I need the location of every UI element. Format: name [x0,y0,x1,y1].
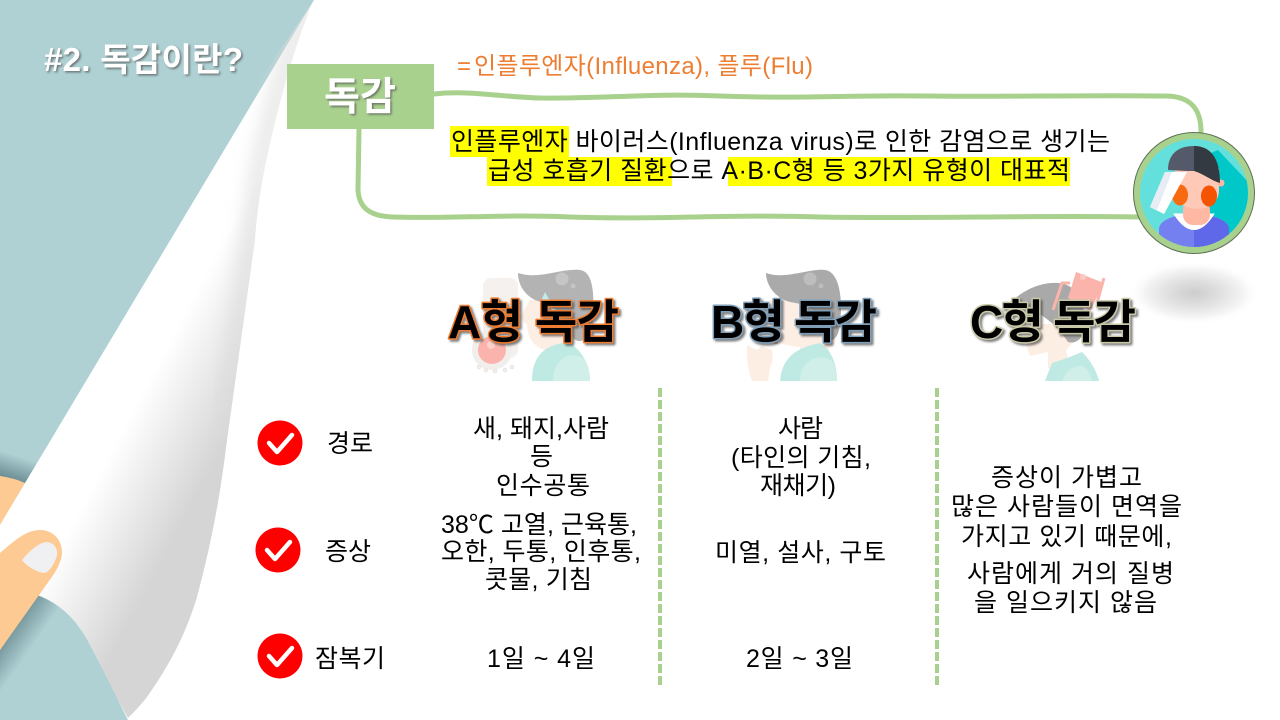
column B: route: 사람 [778,415,823,443]
definition text: 급성 호흡기 질환으로 A·B·C형 등 3가지 유형이 대표적 [488,157,1070,185]
column A: fever illustration [472,270,594,381]
column B: route: 재채기) [760,472,836,500]
green label box [287,64,434,129]
column A: route: 새, 돼지,사람 [473,415,609,443]
column B: route: (타인의 기침, [731,444,871,472]
column B: coughing illustration [747,270,841,381]
check icon: symptoms [256,528,300,572]
column A: route: 인수공통 [496,472,590,500]
column C: description: 사람에게 거의 질병 [967,560,1174,588]
fingernail [22,542,57,573]
column C: description: 가지고 있기 때문에, [961,523,1172,551]
alias line: = [457,53,471,80]
green label box: 독감 [324,76,396,119]
title: #2. 독감이란? [44,41,243,78]
column B: route [731,415,871,500]
column C: description: 을 일으키지 않음 [974,589,1157,617]
definition text: 인플루엔자 바이러스(Influenza virus)로 인한 감염으로 생기는 [451,128,1110,156]
heading: B형 독감: B형 독감 [711,296,877,348]
column A: route [473,415,609,500]
column B: symptoms: 미열, 설사, 구토 [715,539,886,567]
check icon: route [258,420,302,466]
icon: avatar with fever [1134,132,1254,254]
heading: C형 독감: C형 독감 [970,296,1136,348]
definition text [450,126,1110,186]
column B: incubation: 2일 ~ 3일 [746,645,853,673]
column A: route: 등 [530,443,553,471]
page curl background [0,0,314,720]
heading: A형 독감: A형 독감 [448,296,619,348]
column C: description: 증상이 가볍고 [991,464,1142,492]
column A: symptoms: 오한, 두통, 인후통, [441,538,641,566]
connector frame lines [358,93,1201,218]
column C: description [951,464,1182,617]
row label: symptoms: 증상 [325,538,371,566]
row label: incubation: 잠복기 [315,645,385,673]
curled page flap [0,0,314,718]
column C: description: 많은 사람들이 면역을 [951,493,1182,521]
alias line: 인플루엔자(Influenza), 플루(Flu) [474,53,813,80]
check icon: incubation [258,634,302,678]
flap edge shading [237,3,312,300]
column A: symptoms: 38℃ 고열, 근육통, [441,511,637,539]
finger [0,530,62,650]
column A: incubation: 1일 ~ 4일 [487,645,595,673]
avatar ground shadow [1128,261,1260,325]
teal page [0,0,314,525]
dashed dividers [660,388,937,685]
column C: headache illustration [1013,272,1104,381]
column A: symptoms [441,511,641,594]
upper thumb [0,476,25,525]
lower teal corner [0,595,128,720]
row label: route: 경로 [327,430,373,458]
column A: symptoms: 콧물, 기침 [485,566,592,594]
